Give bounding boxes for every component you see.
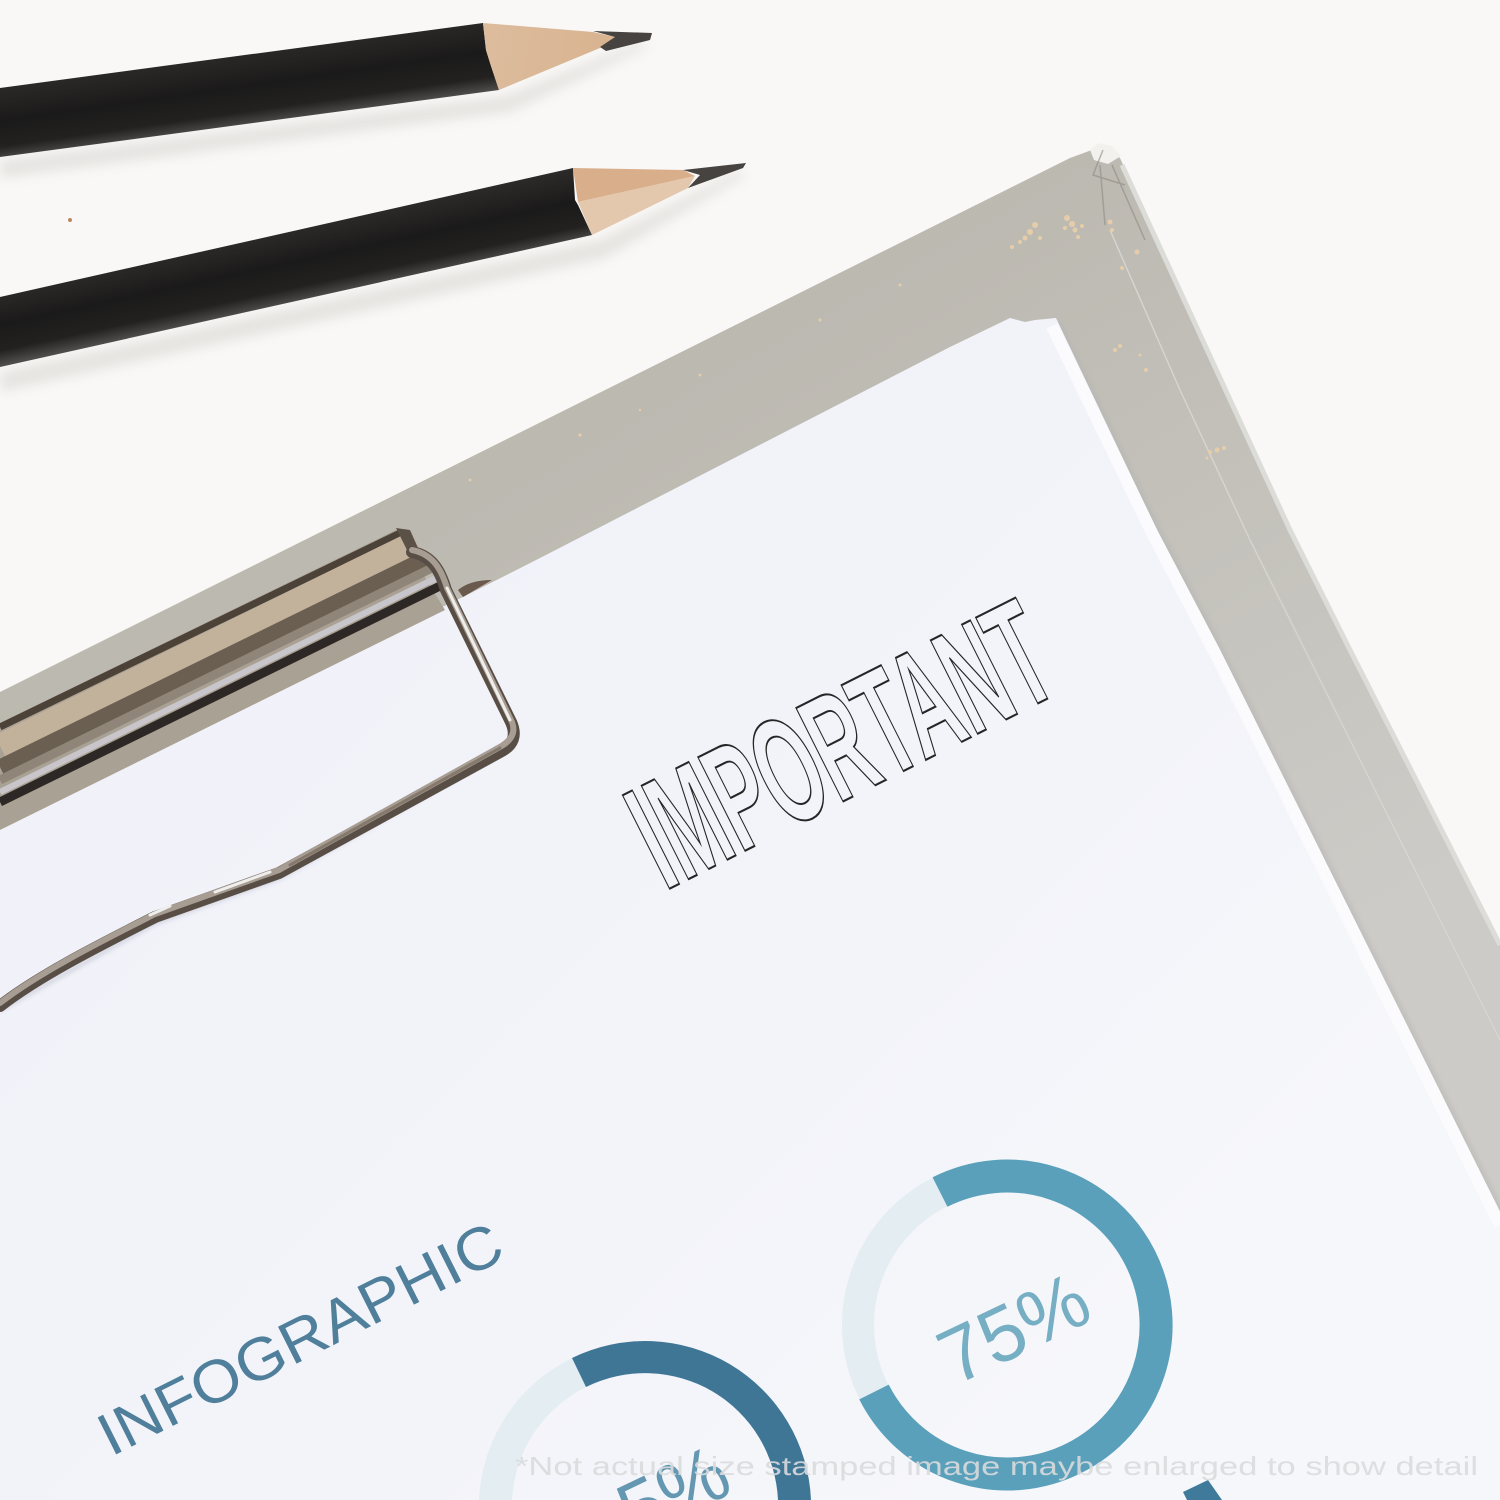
clip tube stripes — [0, 533, 440, 802]
donut chart: partially visible — [479, 1341, 811, 1500]
icon: upper pencil — [0, 23, 652, 157]
wire shadow — [0, 745, 513, 1010]
clipboard gold speckles — [469, 215, 1226, 481]
icon: lower pencil — [0, 163, 746, 367]
pencil shadows — [0, 42, 745, 392]
clipboard outer edge highlight — [1122, 165, 1500, 945]
donut chart: 75% — [858, 1176, 1156, 1474]
clipboard corner crease — [1093, 150, 1145, 240]
clipboard board — [0, 143, 1500, 1300]
speck on tabletop — [68, 218, 72, 222]
paper shadow on clipboard — [1057, 322, 1500, 1212]
heading: INFOGRAPHIC: INFOGRAPHIC — [87, 1209, 513, 1469]
clipboard corner frayed tape — [1090, 143, 1121, 164]
slot behind wire clip — [458, 580, 492, 597]
paper bright edge — [1052, 326, 1500, 1225]
partially visible chart bar — [1183, 1480, 1222, 1500]
clip base plate — [0, 530, 445, 830]
clipboard fold line — [1110, 230, 1500, 1040]
stamp impression: IMPORTANT outline text: IMPORTANT — [603, 568, 1078, 920]
metal clip — [0, 528, 445, 830]
clip end cap — [396, 528, 418, 552]
disclaimer caption: *Not actual size stamped image maybe enlarged to show detail — [515, 1451, 1478, 1481]
wire clip loop — [0, 550, 514, 1006]
paper sheet stack — [0, 318, 1500, 1500]
donut value: 75%: 75% — [924, 1255, 1103, 1401]
